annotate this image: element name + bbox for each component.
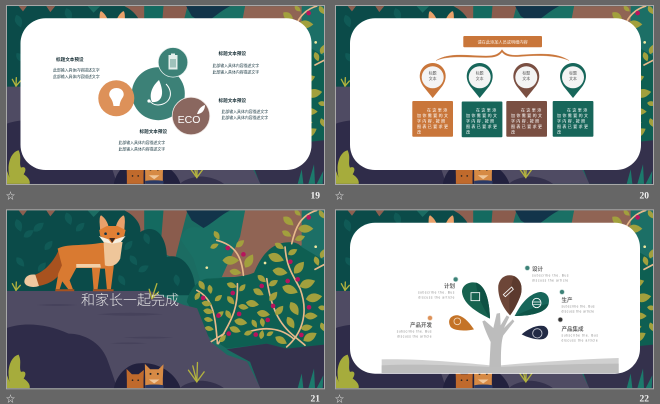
slide 20 star and number: 20: [640, 192, 649, 202]
orange leaf with magnifier icon: [449, 315, 474, 330]
callout: bottom text: 此部输入具体内容描述文字: [118, 140, 165, 145]
pin 2: 标题: [476, 70, 484, 76]
slide 19 frame: [6, 6, 324, 184]
label: production: 生产: [562, 296, 573, 304]
box 1: 改: [417, 128, 422, 134]
label: product development: [397, 321, 432, 338]
box 1: 在这里添: [427, 106, 449, 112]
callout: top right text: 此部输入具体内容描述文字: [212, 63, 259, 68]
label: production: discuss the article: [562, 310, 594, 314]
callout: left text: 此部输入具体内容描述文字: [53, 74, 100, 79]
pin 4: 文本: [569, 76, 577, 81]
pin 2: 文本: [476, 76, 484, 81]
callout: left text: 标题文本预设: [56, 56, 84, 63]
callout: lower right text: [218, 97, 268, 120]
panel: slide 19: [6, 5, 328, 202]
circle diagram: [98, 48, 210, 135]
curved brace: [436, 50, 569, 60]
brown ECO circle: ECO: [178, 114, 200, 126]
pin 1: 标题: [429, 70, 437, 76]
label: design: discuss the article: [532, 278, 569, 282]
label: product integration: [562, 325, 599, 342]
slide 19 star and number: [6, 191, 320, 202]
top heading bar: [463, 36, 542, 47]
box 1: [412, 101, 453, 137]
slide 20 star and number: ☆: [335, 191, 344, 201]
box 3: 改: [511, 128, 516, 134]
slide 22 forest backdrop: [336, 209, 657, 388]
slide 22 star and number: [335, 394, 649, 404]
slide 19 star and number: 19: [310, 192, 320, 202]
box 2: 加你需要的文: [466, 112, 498, 118]
slide 19 white card: [20, 18, 312, 170]
box 1: 加你需要的文: [417, 112, 449, 118]
label: product integration: 产品集成: [562, 325, 584, 333]
label: plan: 计划: [444, 282, 455, 290]
box 2: [462, 102, 502, 137]
pin 4: 标题: [569, 70, 577, 76]
box 3: 在这里添: [521, 106, 543, 112]
label: production: subscribe the. Bus: [562, 304, 595, 308]
box 4: [553, 101, 593, 137]
box 4: 改: [557, 128, 562, 134]
brown leaf with pencil icon: [498, 275, 522, 315]
box 2: 字内容,按照: [466, 118, 496, 124]
label: product development: 产品开发: [410, 321, 432, 329]
marker dots: [428, 266, 564, 322]
teal leaf with database icon: [515, 292, 549, 316]
navy leaf with gear icon: [522, 326, 548, 339]
slide 21 star and number: [6, 394, 320, 404]
pin 3: 文本: [522, 76, 530, 81]
callout: bottom text: [118, 128, 167, 152]
orange circle with bulb icon: [98, 80, 134, 116]
label: design: subscribe the. Bus: [532, 274, 569, 278]
box 2: 改: [466, 128, 471, 134]
slide 20 forest backdrop: [336, 5, 657, 184]
box 2: 在这里添: [476, 106, 498, 112]
panel: slide 22: [335, 209, 657, 404]
slide 20 white card: [350, 18, 641, 170]
label: product development: subscribe the. Bus: [397, 330, 432, 334]
label: production: [562, 296, 595, 314]
teal leaf with screen icon: [462, 282, 490, 319]
slide 21 forest scene with fox: [7, 209, 328, 388]
label: product integration: subscribe the. Bus: [562, 334, 599, 338]
box 2: 图表已要求更: [466, 123, 498, 129]
label: plan: [418, 282, 455, 300]
callout: lower right text: 标题文本预设: [218, 97, 246, 104]
main teal circle with leaf icon: [132, 67, 185, 120]
callout: bottom text: 此部输入具体内容描述文字: [118, 146, 165, 152]
slide 21 frame: [6, 210, 324, 389]
slide 21 star and number: ☆: [6, 394, 15, 404]
slide 22 star and number: ☆: [335, 394, 344, 404]
box 3: 图表已要求更: [511, 123, 543, 129]
pin 1: [420, 63, 446, 98]
hand-shaped tree: [482, 313, 514, 367]
label: product integration: discuss the article: [562, 338, 598, 342]
pin 1: 文本: [429, 76, 437, 81]
pin 4: [560, 63, 586, 98]
slide 22 white card: [350, 223, 640, 374]
callout: bottom text: 标题文本预设: [140, 128, 167, 135]
callout: left text: [53, 56, 100, 79]
slide 21 title: 和家长一起完成: [81, 290, 179, 310]
box 4: 加你需要的文: [557, 112, 589, 118]
label: plan: subscribe the. Bus: [418, 290, 455, 294]
pin 2: [467, 63, 493, 98]
callout: top right text: 标题文本预设: [218, 50, 246, 57]
pin 3: [513, 63, 539, 98]
label: product development: discuss the article: [397, 334, 432, 338]
slide 19 forest backdrop: [7, 5, 328, 184]
slide 20 star and number: [335, 191, 649, 202]
panel: slide 21: [6, 209, 328, 404]
pin 3: 标题: [522, 70, 530, 76]
box 4: 在这里添: [567, 106, 589, 112]
callout: lower right text: 此部输入具体内容描述文字: [222, 109, 268, 114]
box 4: 字内容,按照: [557, 118, 587, 124]
box 1: 图表已要求更: [417, 123, 449, 129]
callout: top right text: [212, 50, 259, 74]
label: design: 设计: [532, 265, 544, 273]
panel: slide 20: [335, 5, 657, 202]
box 1: 字内容,按照: [417, 118, 447, 124]
slide 20 frame: [336, 6, 654, 184]
box 3: 加你需要的文: [511, 112, 543, 118]
box 3: 字内容,按照: [511, 118, 541, 124]
callout: left text: 此部输入具体内容描述文字: [53, 68, 100, 72]
box 3: [506, 101, 547, 137]
top heading bar: 请在此添加人员或明细内容: [477, 38, 528, 46]
slide 19 star and number: ☆: [6, 191, 15, 201]
label: design: [532, 265, 569, 282]
tree diagram: [382, 266, 619, 373]
slide 22 frame: [336, 210, 654, 389]
callout: lower right text: 此部输入具体内容描述文字: [222, 115, 268, 120]
open book base: [382, 358, 619, 373]
label: plan: discuss the article: [418, 296, 455, 300]
small teal circle with battery icon: [158, 48, 188, 77]
callout: top right text: 此部输入具体内容描述文字: [212, 70, 259, 74]
box 4: 图表已要求更: [557, 123, 589, 129]
